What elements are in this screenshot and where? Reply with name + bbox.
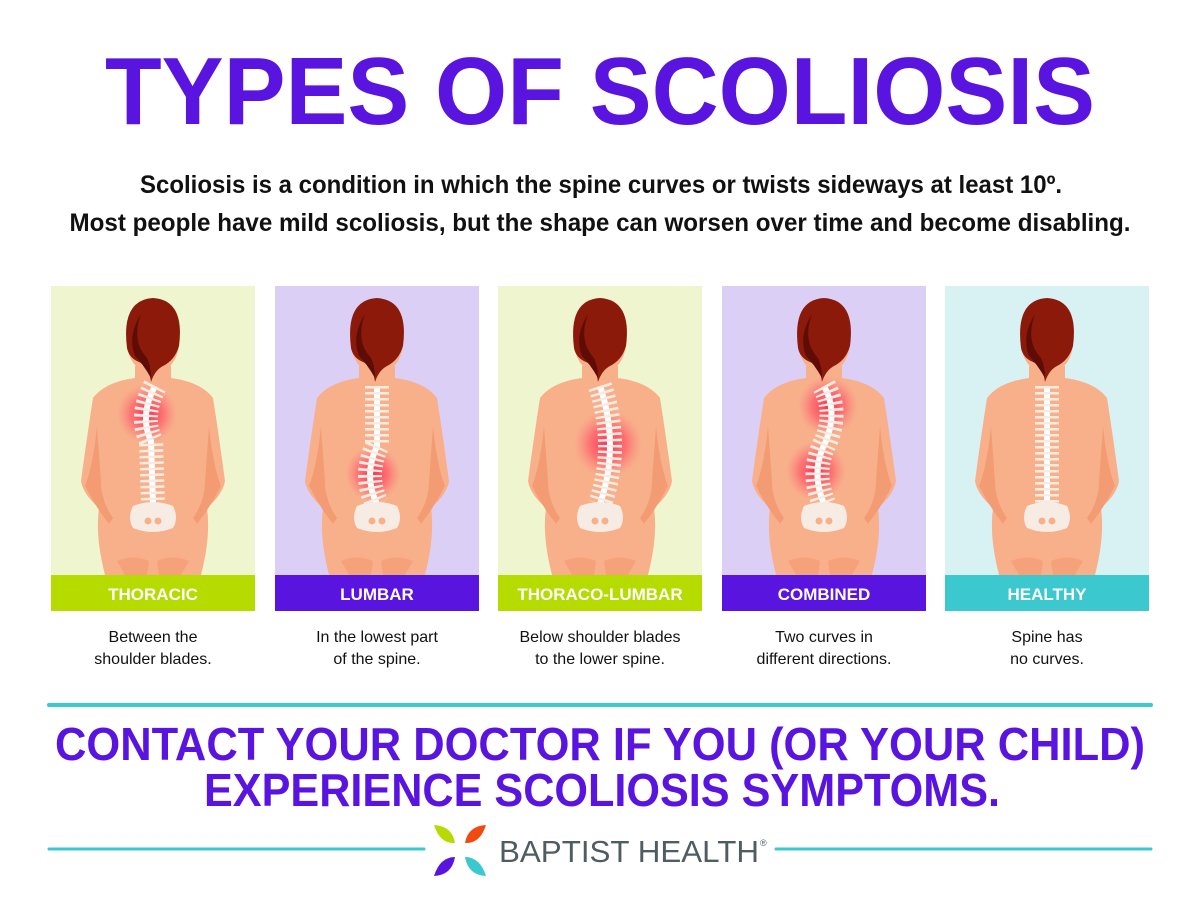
- panel: lumbar: LUMBAR: [340, 585, 414, 604]
- panel: healthy: [945, 286, 1149, 611]
- panel: healthy: HEALTHY: [1007, 585, 1087, 604]
- subtitle: Scoliosis is a condition in which the spine curves or twists sideways at least 10º.: [140, 171, 1062, 199]
- panel: thoracic: [51, 286, 255, 611]
- panel: lumbar: [275, 286, 479, 611]
- description: combined: Two curves in: [775, 629, 873, 646]
- description: combined: different directions.: [757, 651, 891, 668]
- call to action: EXPERIENCE SCOLIOSIS SYMPTOMS.: [204, 764, 1000, 816]
- description: healthy: no curves.: [1010, 651, 1084, 668]
- description: thoraco-lumbar: to the lower spine.: [535, 651, 665, 668]
- subtitle: [70, 171, 1130, 237]
- description: healthy: Spine has: [1011, 629, 1083, 646]
- panel: combined: COMBINED: [778, 585, 870, 604]
- panel: thoraco-lumbar: [498, 286, 702, 611]
- call to action: [55, 718, 1145, 816]
- description: lumbar: of the spine.: [333, 651, 421, 668]
- logo: Baptist Health: [434, 825, 767, 876]
- subtitle: Most people have mild scoliosis, but the shape can worsen over time and become disabling.: [70, 209, 1130, 237]
- panel: thoracic: THORACIC: [108, 585, 198, 604]
- panel: combined: [722, 286, 926, 611]
- panel: thoraco-lumbar: THORACO-LUMBAR: [517, 585, 683, 604]
- logo: Baptist Health: BAPTIST HEALTH: [499, 834, 759, 869]
- description: thoracic: Between the: [109, 629, 198, 646]
- title: TYPES OF SCOLIOSIS: [105, 38, 1095, 145]
- call to action: CONTACT YOUR DOCTOR IF YOU (OR YOUR CHILD): [55, 718, 1145, 770]
- description: thoracic: shoulder blades.: [94, 651, 212, 668]
- icon: leaves: [434, 825, 486, 876]
- glow: thoracic: [117, 384, 177, 444]
- logo: Baptist Health: ®: [760, 838, 767, 848]
- description: thoraco-lumbar: Below shoulder blades: [520, 629, 680, 646]
- description: lumbar: In the lowest part: [316, 629, 438, 646]
